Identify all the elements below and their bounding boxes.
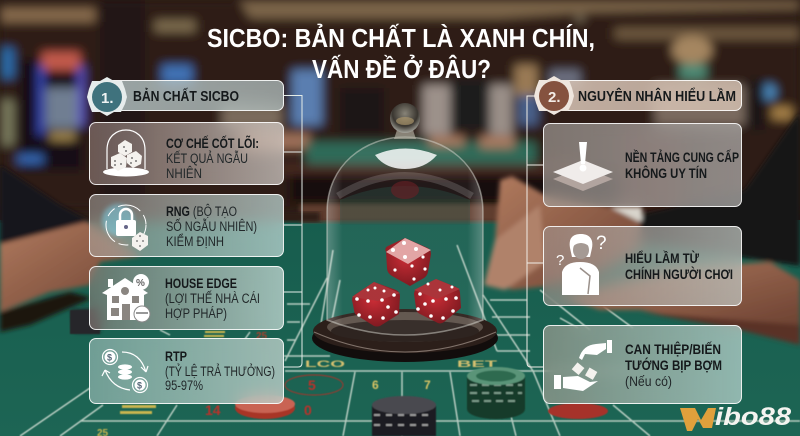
header: left — [100, 80, 284, 111]
title: VẤN ĐỀ Ở ĐÂU? — [312, 53, 491, 84]
table surface — [0, 204, 800, 436]
card: player misconceptions — [543, 226, 742, 306]
table surface: BET — [457, 359, 498, 369]
table label: LCO — [305, 359, 345, 369]
betting chips — [70, 310, 608, 436]
card: house edge: (LỢI THẾ NHÀ CÁI — [165, 291, 260, 306]
icon: dice in dome — [103, 130, 149, 176]
card: RTP: 95-97% — [165, 378, 203, 393]
header: right — [558, 80, 742, 111]
icon: coins and arrows — [102, 349, 148, 392]
card: player misconceptions: HIỂU LẦM TỪ — [625, 251, 699, 266]
icon: confused person: ? — [596, 233, 606, 254]
card: manipulation: (Nếu có) — [625, 374, 672, 389]
card: core mechanism: CƠ CHẾ CỐT LÕI: — [166, 136, 259, 151]
card: core mechanism — [89, 122, 284, 185]
icon: warning on platform — [553, 142, 613, 191]
left player hand and sleeve — [0, 165, 140, 332]
card: manipulation: CAN THIỆP/BIẾN — [625, 342, 721, 357]
table surface: 25 — [256, 331, 268, 342]
table surface: 5 — [308, 377, 316, 393]
card: RNG: RNG (BỘ TẠO — [166, 204, 237, 219]
card: house edge: HỢP PHÁP) — [165, 306, 227, 321]
card: manipulation — [543, 325, 742, 404]
badge: 1 — [87, 77, 127, 116]
connector: right column — [527, 96, 543, 367]
dome base — [312, 309, 498, 362]
badge: 1: 1. — [101, 90, 114, 107]
card: RTP — [89, 338, 284, 404]
card: core mechanism: KẾT QUẢ NGẪU — [166, 151, 248, 166]
icon: house with percent — [102, 274, 150, 322]
icon: hands and dice — [554, 340, 612, 391]
icon: confused person: ? — [556, 252, 564, 269]
card: unreliable platforms — [543, 123, 742, 207]
logo: Wibo88 — [680, 403, 791, 431]
table surface: 7 — [424, 378, 431, 392]
connector: left column — [284, 96, 302, 367]
icon: confused person — [556, 233, 606, 295]
icon: house with percent: % — [136, 278, 145, 289]
title — [207, 23, 595, 84]
logo: Wibo88: ibo88 — [715, 403, 791, 431]
card: RNG: KIỂM ĐỊNH — [166, 234, 224, 249]
card: house edge — [89, 266, 284, 330]
header: left: BẢN CHẤT SICBO — [133, 88, 239, 105]
table surface: 14 — [205, 402, 221, 418]
card: RNG: SỐ NGẪU NHIÊN) — [166, 219, 257, 234]
card: core mechanism: NHIÊN — [166, 166, 202, 181]
card: RTP: RTP — [165, 349, 187, 364]
glass dome with red dice — [312, 103, 498, 362]
table surface: 0 — [304, 402, 312, 418]
card: RNG — [89, 194, 284, 257]
icon: lock with die — [102, 204, 148, 251]
card: manipulation: TƯỚNG BỊP BỢM — [625, 358, 722, 373]
dice — [352, 238, 461, 326]
icon: coins and arrows: $ — [107, 352, 112, 362]
title: SICBO: BẢN CHẤT LÀ XANH CHÍN, — [207, 23, 595, 53]
W mark — [680, 408, 716, 431]
card: unreliable platforms: KHÔNG UY TÍN — [625, 166, 707, 181]
table surface: 6 — [372, 378, 379, 392]
badge: 2 — [534, 76, 574, 115]
right dealer sleeve and hands — [484, 112, 800, 345]
badge: 2: 2. — [548, 89, 561, 106]
icon: coins and arrows: $ — [137, 380, 142, 390]
glass bell — [327, 103, 483, 335]
card: house edge: HOUSE EDGE — [165, 276, 237, 291]
